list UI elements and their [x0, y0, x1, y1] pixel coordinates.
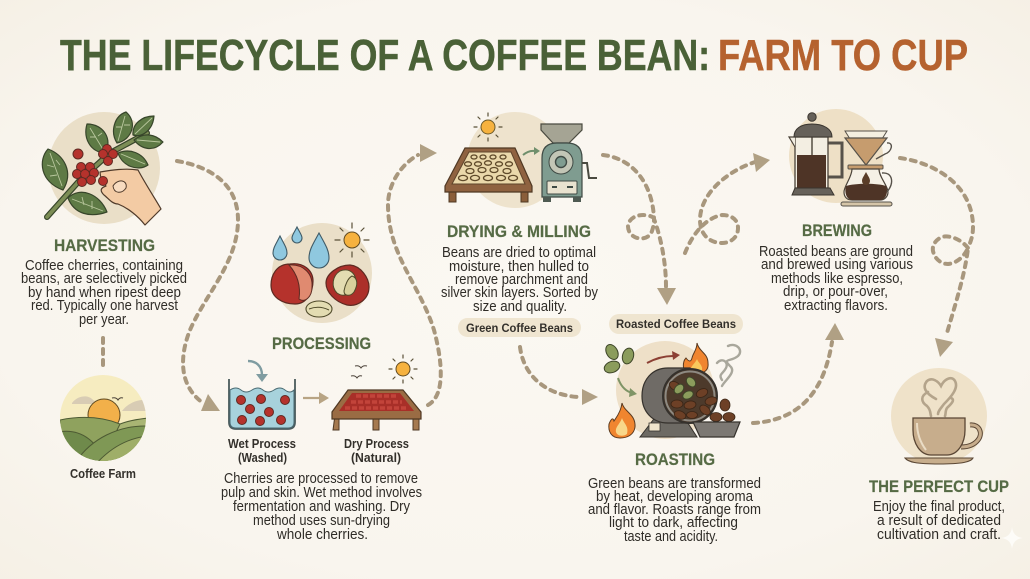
text: roasting description: light to dark, affecting [609, 515, 738, 531]
text: perfect cup description: Enjoy the final product, [873, 499, 1005, 515]
text: brewing description: extracting flavors. [784, 298, 888, 314]
dashed path: roaster pre-brew loop [685, 153, 770, 253]
text: harvesting description: beans, are selectively picked [21, 271, 187, 287]
heading: processing: PROCESSING [272, 334, 371, 353]
icon: drying tray and mill [445, 112, 597, 208]
label: dry process [344, 436, 409, 465]
heading: harvesting: HARVESTING [54, 236, 155, 255]
panel: the perfect cup [869, 368, 1009, 543]
dashed path: drying to roasting [603, 155, 676, 305]
text: perfect cup description [873, 499, 1005, 543]
label: dry process: (Natural) [351, 450, 401, 465]
text: processing description: whole cherries. [276, 527, 368, 543]
text: perfect cup description: a result of dedicated [877, 513, 1001, 529]
panel: brewing [759, 109, 913, 314]
dashed path: harvesting to processing [177, 161, 238, 411]
icon: water, sun and cherries [271, 223, 372, 323]
label: roasted coffee beans: Roasted Coffee Beans [616, 317, 736, 331]
text: roasting description [588, 476, 761, 545]
text: drying description: remove parchment and [455, 272, 588, 288]
text: brewing description: Roasted beans are ground [759, 244, 913, 260]
text: harvesting description: by hand when ripest deep [28, 285, 181, 301]
icon: french press and pour-over [789, 109, 892, 206]
dashed path: green beans to roaster [520, 347, 598, 405]
dashed path: brewing to perfect cup [900, 158, 973, 357]
dashed path: processing to drying [388, 144, 441, 405]
icon: hand picking coffee cherries [42, 112, 163, 225]
icon: corner sparkle [1001, 527, 1023, 549]
text: roasting description: by heat, developing aroma [596, 489, 754, 505]
icon: wet process tank [229, 361, 295, 429]
text: drying description: size and quality. [473, 299, 567, 315]
panel: coffee farm [58, 375, 148, 481]
text: brewing description [759, 244, 913, 314]
text: roasting description: taste and acidity. [624, 529, 718, 545]
icon: dry process table [332, 355, 421, 430]
heading: drying and milling: DRYING & MILLING [447, 222, 591, 241]
label: green coffee beans: Green Coffee Beans [466, 321, 573, 335]
icon: cup with heart steam [891, 368, 987, 464]
text: processing description: fermentation and washing. Dry [233, 499, 411, 515]
dashed connector: farm to harvesting [101, 338, 105, 370]
text: drying description [441, 245, 599, 315]
text: drying description: silver skin layers. Sorted by [441, 285, 599, 301]
label: wet process: Wet Process [228, 436, 296, 451]
heading: roasting: ROASTING [635, 450, 715, 469]
text: roasting description: Green beans are transformed [588, 476, 761, 492]
text: processing description: Cherries are processed to remove [224, 471, 418, 487]
text: harvesting description: red. Typically one harvest [31, 298, 178, 314]
icon: roaster drum with flames [603, 341, 740, 439]
panel: processing [221, 223, 422, 543]
label: dry process: Dry Process [344, 436, 409, 451]
panel: harvesting [21, 112, 187, 328]
label: wet process: (Washed) [238, 450, 287, 465]
dashed path: roasting to brewing [753, 323, 844, 423]
panel: drying and milling [441, 112, 599, 337]
text: processing description: method uses sun-drying [253, 513, 390, 529]
panel: roasting [588, 314, 761, 545]
text: perfect cup description: cultivation and craft. [877, 527, 1001, 543]
text: drying description: moisture, then hulled to [449, 259, 589, 275]
text: harvesting description [21, 258, 187, 328]
text: drying description: Beans are dried to optimal [442, 245, 596, 261]
label: roasted coffee beans [609, 314, 743, 334]
text: harvesting description: per year. [79, 312, 129, 328]
arrow: wet to dry [303, 392, 329, 404]
text: harvesting description: Coffee cherries, containing [25, 258, 183, 274]
label: coffee farm: Coffee Farm [70, 466, 136, 481]
title: THE LIFECYCLE OF A COFFEE BEAN: [60, 31, 710, 80]
heading: brewing: BREWING [802, 221, 872, 240]
label: green coffee beans [458, 318, 581, 337]
text: processing description [221, 471, 422, 543]
text: brewing description: and brewed using various [761, 257, 913, 273]
title: FARM TO CUP [718, 31, 968, 80]
text: brewing description: methods like espresso, [771, 271, 903, 287]
label: wet process [228, 436, 296, 465]
heading: the perfect cup: THE PERFECT CUP [869, 477, 1009, 496]
text: processing description: pulp and skin. Wet method involves [221, 485, 422, 501]
text: brewing description: drip, or pour-over, [783, 284, 888, 300]
text: roasting description: and flavor. Roasts range from [588, 502, 761, 518]
icon: farm landscape [58, 375, 148, 465]
